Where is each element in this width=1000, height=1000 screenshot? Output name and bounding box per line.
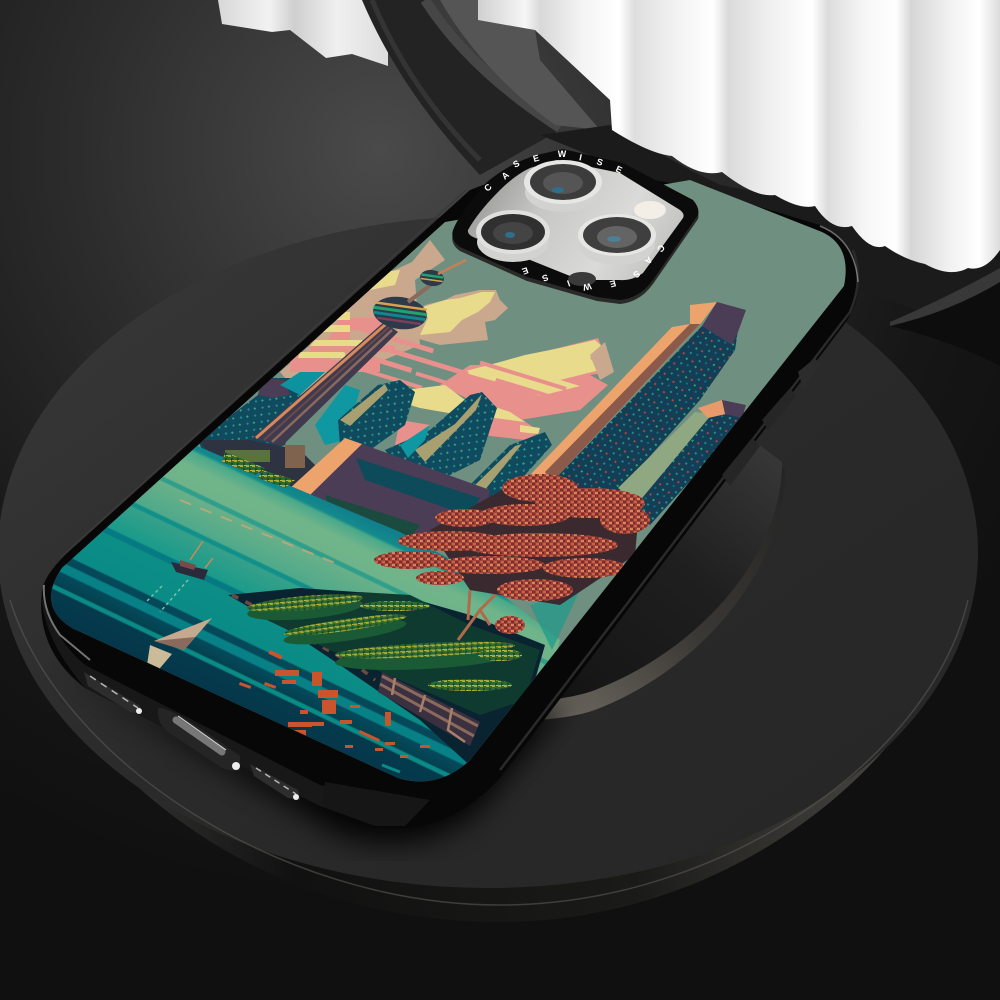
CN tower	[252, 260, 466, 446]
brand text bottom: CASEWISE	[521, 243, 667, 293]
left city blocks	[200, 372, 325, 450]
side buttons	[722, 358, 820, 486]
dark shore land	[228, 588, 545, 770]
phone shadow	[60, 670, 570, 843]
large round platform	[0, 216, 978, 922]
bottom right speaker	[250, 764, 300, 800]
phone case body	[41, 165, 858, 828]
shoreline bushes	[222, 452, 295, 488]
left lens	[476, 210, 550, 262]
tall right tower	[530, 302, 746, 490]
sailboat	[147, 618, 212, 674]
flash	[634, 201, 666, 219]
low purple building	[288, 438, 490, 540]
right lens	[578, 214, 656, 265]
sky	[51, 180, 846, 782]
clouds	[280, 240, 614, 445]
white curtain left piece	[218, 0, 388, 66]
small round platform	[350, 400, 785, 721]
bottom left speaker	[84, 672, 142, 714]
green bushes	[246, 591, 540, 715]
camera bump	[452, 149, 698, 304]
lidar sensor	[568, 272, 596, 286]
white curtain right	[478, 0, 1000, 272]
mid city skyscrapers	[315, 380, 552, 505]
orange reflections in water	[239, 650, 430, 758]
teal dashes near bottom	[382, 764, 400, 774]
waterfront low buildings	[200, 440, 315, 486]
dark curved stand	[362, 0, 600, 175]
top lens	[524, 160, 602, 212]
dashed reflection on water	[180, 500, 340, 565]
wooden fence	[378, 672, 480, 746]
second right tower	[618, 400, 746, 525]
brand text top: CASEWISE	[482, 149, 624, 193]
charging port	[158, 708, 240, 771]
water	[51, 446, 560, 782]
pixel art case artwork	[51, 180, 846, 782]
dark wedge object at right	[890, 268, 1000, 366]
tugboat	[146, 541, 213, 612]
stone edge of shore	[232, 595, 375, 680]
dark shadow behind phone at right	[540, 125, 1000, 340]
tree	[374, 474, 650, 650]
